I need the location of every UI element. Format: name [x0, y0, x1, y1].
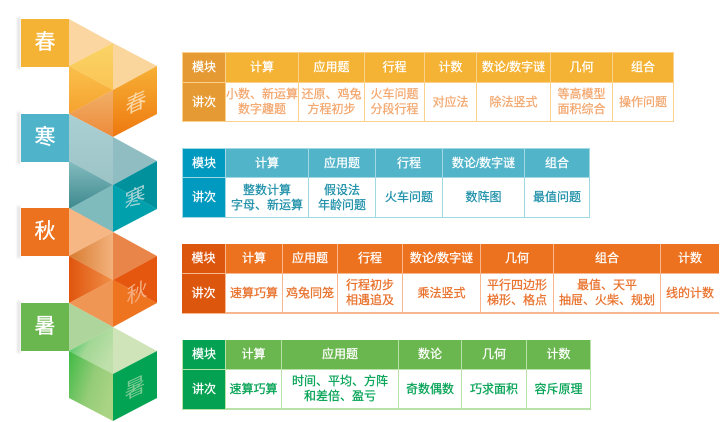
table: autumn: 乘法竖式 [417, 286, 466, 300]
cube: autumn [69, 208, 157, 327]
table: spring: 方程初步 [307, 102, 356, 116]
table: winter: 组合 [545, 156, 569, 170]
table: winter: 最值问题 [533, 190, 581, 204]
cube: summer: 暑 [125, 371, 145, 405]
table: winter: 年龄问题 [318, 198, 366, 212]
table: autumn: 速算巧算 [230, 286, 278, 300]
table: spring: 对应法 [432, 94, 468, 108]
table: spring: 几何 [569, 60, 594, 74]
table: spring: 分段行程 [370, 102, 418, 116]
table: winter: 行程 [397, 156, 421, 170]
table: summer: 讲次 [192, 382, 216, 396]
table: spring: 计数 [438, 60, 462, 74]
table: spring: 计算 [250, 60, 274, 74]
label: summer [21, 303, 69, 351]
table: summer: 模块 [192, 347, 216, 361]
table: spring [182, 52, 674, 122]
table: autumn: 行程 [358, 251, 382, 265]
table: spring: 数字趣题 [238, 102, 286, 116]
table: summer: 容斥原理 [534, 382, 582, 396]
table: summer: 速算巧算 [229, 382, 278, 396]
table: spring: 火车问题 [370, 87, 418, 101]
table: spring: 行程 [382, 60, 406, 74]
table: autumn: 相遇追及 [346, 293, 394, 307]
table: winter: 数论/数字谜 [452, 156, 515, 170]
cube: summer [69, 303, 157, 421]
table: winter [182, 148, 590, 218]
table: autumn: 计数 [678, 251, 702, 265]
table: winter: 模块 [192, 156, 216, 170]
table: spring: 数论/数字谜 [482, 60, 545, 74]
table: spring: 操作问题 [619, 94, 667, 108]
table: spring: 面积综合 [557, 102, 606, 116]
table: autumn: 行程初步 [346, 278, 394, 292]
table: autumn: 计算 [242, 251, 266, 265]
label: autumn [21, 208, 69, 256]
table: summer [182, 340, 591, 410]
table: winter: 数阵图 [465, 190, 502, 204]
label: winter: 寒 [34, 126, 56, 149]
table: summer: 和差倍、盈亏 [304, 389, 376, 403]
label: spring [21, 19, 69, 67]
table: autumn: 平行四边形 [487, 278, 547, 292]
table: winter: 计算 [255, 156, 279, 170]
table: summer: 计数 [546, 347, 570, 361]
label: spring: 春 [34, 31, 56, 54]
table: autumn: 线的计数 [666, 286, 714, 300]
table: spring: 讲次 [192, 94, 216, 108]
table: winter: 字母、新运算 [231, 198, 303, 212]
table: summer: 数论 [418, 347, 442, 361]
table: spring: 模块 [192, 60, 216, 74]
table: spring: 应用题 [313, 60, 350, 74]
table: spring: 还原、鸡兔 [301, 87, 362, 101]
table: autumn: 梯形、格点 [487, 293, 547, 307]
table: spring: 小数、新运算 [226, 87, 298, 101]
table: spring: 除法竖式 [489, 94, 538, 108]
table: summer: 计算 [241, 347, 266, 361]
table: autumn: 组合 [595, 251, 619, 265]
table: autumn: 抽屉、火柴、规划 [559, 293, 655, 307]
table: winter: 整数计算 [243, 182, 291, 196]
table: autumn: 讲次 [191, 286, 216, 300]
cube: winter [69, 114, 157, 232]
table: winter: 假设法 [324, 182, 360, 196]
table: winter: 火车问题 [385, 190, 433, 204]
cube: spring [69, 19, 157, 137]
table: autumn: 最值、天平 [577, 278, 637, 292]
table: summer: 时间、平均、方阵 [292, 374, 388, 388]
table: autumn: 数论/数字谜 [410, 251, 473, 265]
table: winter: 讲次 [192, 190, 216, 204]
table: winter: 应用题 [324, 156, 360, 170]
table: autumn: 几何 [505, 251, 529, 265]
table: summer: 几何 [482, 347, 506, 361]
table: summer: 应用题 [322, 347, 358, 361]
cube: winter: 寒 [125, 181, 145, 215]
table: spring: 组合 [631, 60, 655, 74]
table: autumn [182, 244, 719, 314]
table: spring: 等高模型 [557, 87, 606, 101]
table: autumn: 应用题 [292, 251, 328, 265]
label: summer: 暑 [34, 315, 56, 338]
cube: spring: 春 [126, 86, 146, 120]
cube: autumn: 秋 [127, 276, 147, 310]
table: summer: 巧求面积 [470, 382, 518, 396]
table: autumn: 鸡兔同笼 [286, 286, 334, 300]
label: autumn: 秋 [34, 220, 56, 243]
label: winter [21, 114, 69, 162]
table: autumn: 模块 [191, 251, 216, 265]
table: summer: 奇数偶数 [406, 382, 454, 396]
